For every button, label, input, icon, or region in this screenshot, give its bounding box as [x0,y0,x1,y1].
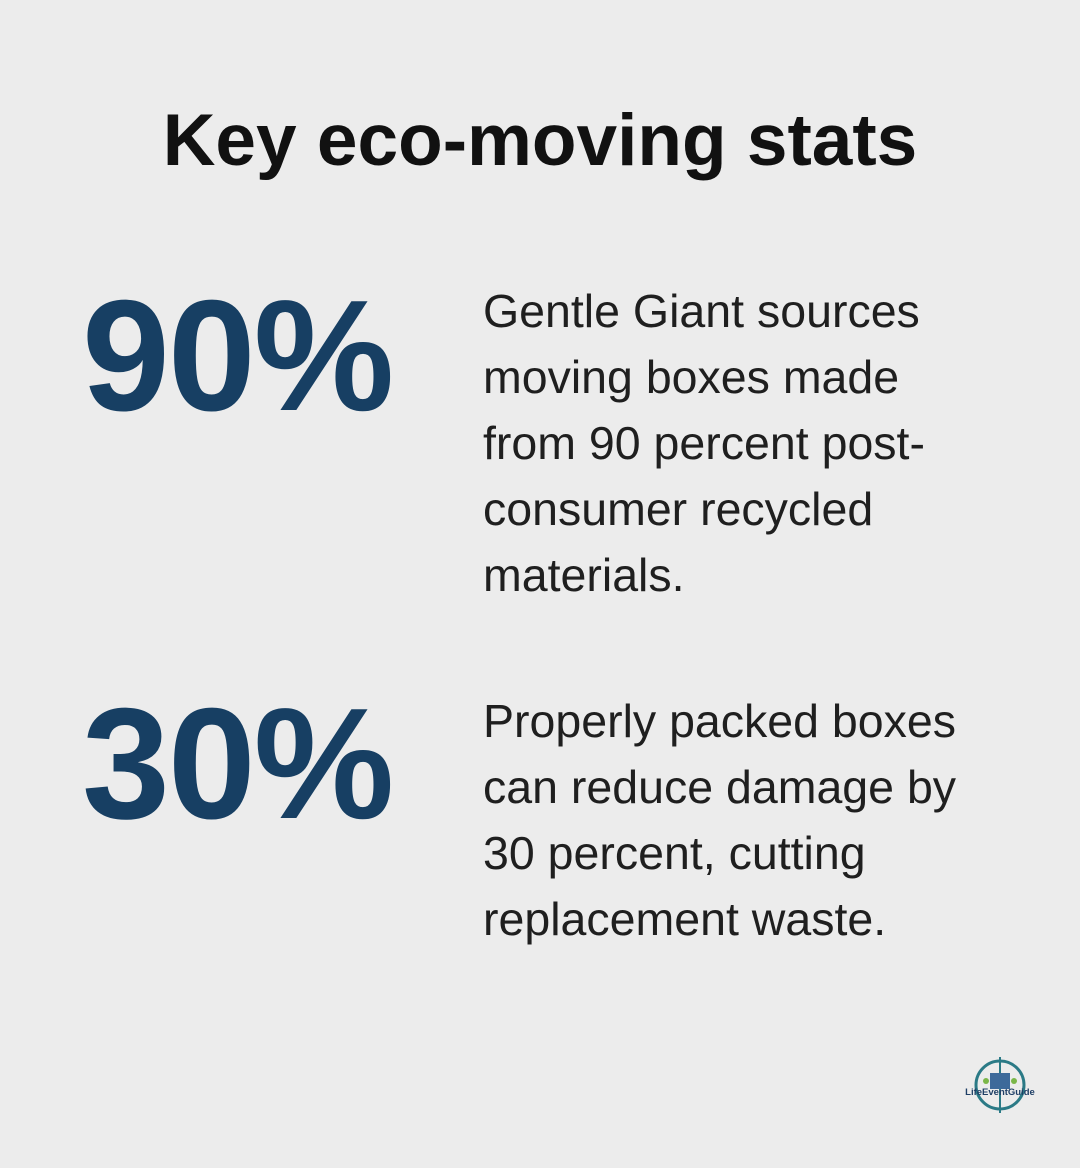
stat 2 number: 30% [82,676,392,852]
stat 2 text: Properly packed boxes [483,695,956,747]
logo: LifeEventGuide [965,1087,1035,1098]
stat 1 text: moving boxes made [483,351,899,403]
stat 2 text: replacement waste. [483,893,886,945]
logo [965,1057,1035,1113]
stat 1 text: Gentle Giant sources [483,285,920,337]
title: Key eco-moving stats [163,100,917,181]
stat 2 text: can reduce damage by [483,761,956,813]
stat 2 text [483,695,956,945]
stat 1 text: materials. [483,549,685,601]
stat 1 text: from 90 percent post- [483,417,925,469]
stat 1 text [483,285,925,601]
stat 2 text: 30 percent, cutting [483,827,866,879]
stat 1 text: consumer recycled [483,483,873,535]
stat 1 number: 90% [82,268,392,444]
